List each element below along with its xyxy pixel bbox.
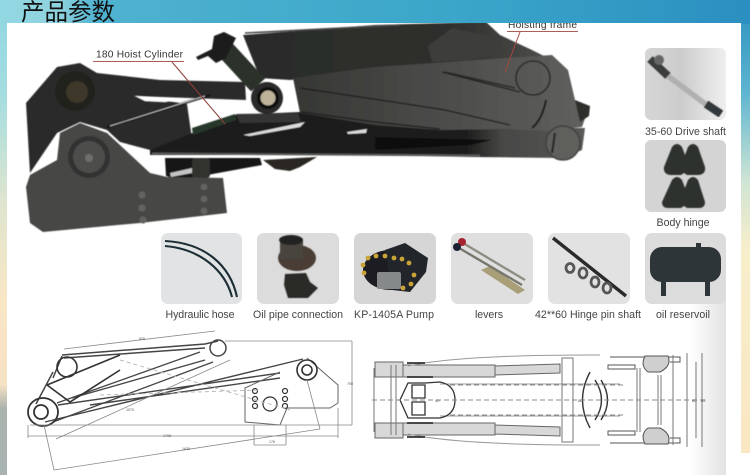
piston rod (107, 95, 210, 127)
upper dark frame (243, 22, 552, 80)
leader: hoisting frame: Hoisting frame (508, 20, 577, 31)
frame end disc (445, 61, 550, 95)
inner arms (53, 352, 213, 422)
dashed centre lines (372, 385, 708, 415)
lower arm (45, 359, 303, 422)
leader: hoist cylinder (93, 50, 225, 124)
top arm (36, 341, 218, 404)
under-arm pad (263, 157, 317, 171)
tank icon (650, 243, 721, 296)
label: Oil pipe connection (253, 309, 343, 321)
drive shaft icon (650, 55, 721, 114)
pump icon (361, 243, 428, 292)
main hoist machine photo (26, 20, 590, 232)
right pivot (297, 360, 317, 380)
left rear bracket and arm (26, 63, 246, 173)
part: body hinge (645, 140, 726, 229)
rod highlight (170, 168, 192, 177)
part: oil pipe connection (253, 233, 343, 321)
dimension lines (28, 331, 352, 470)
chassis crossbars (374, 353, 702, 447)
label: 35-60 Drive shaft (645, 126, 726, 138)
main bolt (251, 82, 283, 114)
dimension values: 80 (578, 398, 583, 403)
side elevation drawing (28, 331, 353, 470)
upper frame bracket (428, 28, 472, 62)
cylinder body (192, 114, 236, 135)
dimension values (435, 398, 706, 403)
label: 42**60 Hinge pin shaft (535, 309, 641, 321)
part: drive shaft (645, 48, 726, 138)
drum (47, 355, 120, 402)
under-arm cylinder (165, 158, 262, 180)
lower arm rim (152, 154, 480, 156)
white gap in rear bracket (135, 96, 175, 102)
top arm rim (245, 25, 400, 33)
centre unit (400, 382, 455, 418)
dimension values (126, 337, 353, 451)
rear bolt (55, 71, 95, 111)
lower arm (150, 112, 585, 158)
dashed centre lines (100, 360, 290, 410)
hoisting frame grey side (293, 55, 588, 131)
dimension values: 1070 (126, 408, 134, 412)
arm top plate (236, 113, 301, 123)
leader: hoist cylinder: 180 Hoist Cylinder (96, 50, 184, 60)
arm dark inset (375, 137, 492, 150)
top pivot (210, 340, 226, 356)
part: hinge pin shaft (535, 233, 641, 321)
levers icon (453, 238, 525, 294)
part: hydraulic hose (161, 233, 242, 321)
plate holes (138, 184, 207, 224)
end lug (575, 100, 590, 122)
label: Body hinge (656, 217, 710, 229)
pipe connection icon (278, 235, 318, 298)
body hinge icon (662, 144, 705, 208)
part: oil reservoir (645, 233, 726, 321)
pin shaft icon (553, 238, 626, 296)
arm highlights (243, 122, 367, 136)
label: oil reservoil (656, 309, 710, 321)
dimension values: 176 (269, 440, 275, 444)
bottom half (375, 416, 680, 445)
part: pump (354, 233, 436, 321)
lower pivot (546, 126, 580, 160)
part: levers (451, 233, 533, 321)
front plate (26, 123, 227, 232)
label: KP-1405A Pump (354, 309, 434, 321)
front hinge bolt (68, 136, 110, 178)
under-arm bolt cluster (192, 158, 210, 178)
centre boss (582, 372, 608, 428)
dimension values: 1635 (182, 447, 190, 451)
frame crease lines (300, 72, 546, 129)
label: levers (475, 309, 503, 321)
dimension values: 80 (692, 398, 697, 403)
hose icon (165, 241, 237, 297)
top pin tube (196, 32, 258, 85)
dimension values: 700 (347, 382, 353, 386)
top plan drawing (372, 353, 708, 447)
dimension values: 825 (139, 337, 145, 341)
dimension values: 85 (701, 398, 706, 403)
leader: hoisting frame (505, 20, 578, 72)
dimension values: 40 (435, 398, 440, 403)
dimension values: 1798 (163, 434, 171, 438)
right mount plate (245, 358, 338, 425)
top half (375, 355, 680, 384)
label: Hydraulic hose (166, 309, 235, 321)
lower hinge (28, 398, 58, 426)
plate holes (252, 388, 288, 411)
